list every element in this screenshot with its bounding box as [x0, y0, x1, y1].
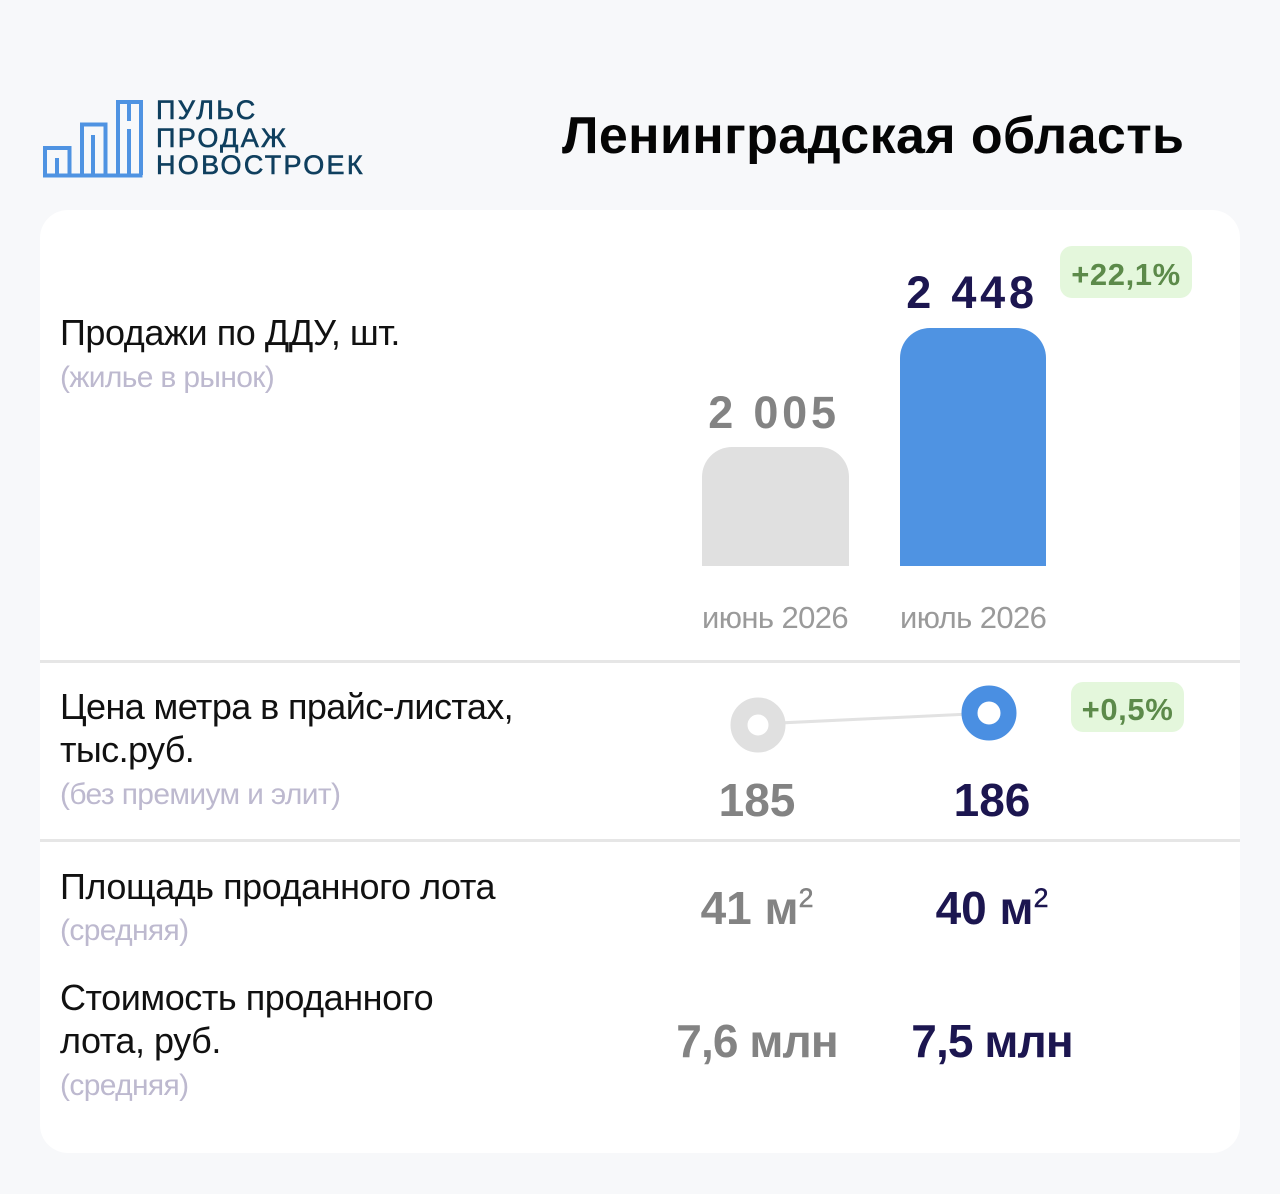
value: area june: 41 м2	[701, 882, 813, 934]
month: june: июнь 2026	[702, 600, 848, 635]
panel: area	[60, 866, 1048, 947]
heading: cost: лота, руб.	[60, 1020, 221, 1061]
badge: sales change	[1060, 246, 1192, 298]
divider	[40, 660, 1240, 663]
logo text: ПУЛЬС	[156, 95, 258, 125]
badge: sales change: +22,1%	[1071, 257, 1181, 292]
heading: cost	[60, 977, 433, 1061]
badge: price change: +0,5%	[1082, 692, 1173, 727]
main card	[40, 210, 1240, 1153]
panel: price	[60, 682, 1184, 826]
heading: price	[60, 686, 513, 770]
bar: july	[900, 328, 1046, 566]
value: area july: 40 м2	[936, 882, 1048, 934]
panel: sales	[60, 246, 1192, 635]
note: cost: (средняя)	[60, 1069, 188, 1102]
value: price june: 185	[719, 774, 795, 826]
heading: area: Площадь проданного лота	[60, 866, 495, 907]
value: june sales: 2 005	[708, 387, 840, 438]
panel: cost	[60, 977, 1073, 1102]
heading: price: тыс.руб.	[60, 729, 194, 770]
month: july: июль 2026	[900, 600, 1046, 635]
bar: june	[702, 447, 849, 566]
divider	[40, 839, 1240, 842]
value: cost july: 7,5 млн	[911, 1015, 1073, 1067]
note: sales: (жилье в рынок)	[60, 361, 274, 394]
title: Ленинградская область	[562, 107, 1184, 165]
icon: building bars	[43, 100, 143, 178]
logo	[43, 95, 365, 180]
note: area: (средняя)	[60, 914, 188, 947]
note: price: (без премиум и элит)	[60, 778, 340, 811]
heading: sales: Продажи по ДДУ, шт.	[60, 312, 400, 353]
value: cost june: 7,6 млн	[676, 1015, 838, 1067]
badge: price change	[1071, 682, 1184, 732]
value: july sales: 2 448	[906, 267, 1038, 318]
value: price july: 186	[954, 774, 1030, 826]
heading: price: Цена метра в прайс-листах,	[60, 686, 513, 727]
logo text	[156, 95, 365, 180]
chart: price dots	[730, 686, 1016, 752]
logo text: НОВОСТРОЕК	[156, 150, 365, 180]
logo text: ПРОДАЖ	[156, 122, 288, 152]
heading: cost: Стоимость проданного	[60, 977, 433, 1018]
